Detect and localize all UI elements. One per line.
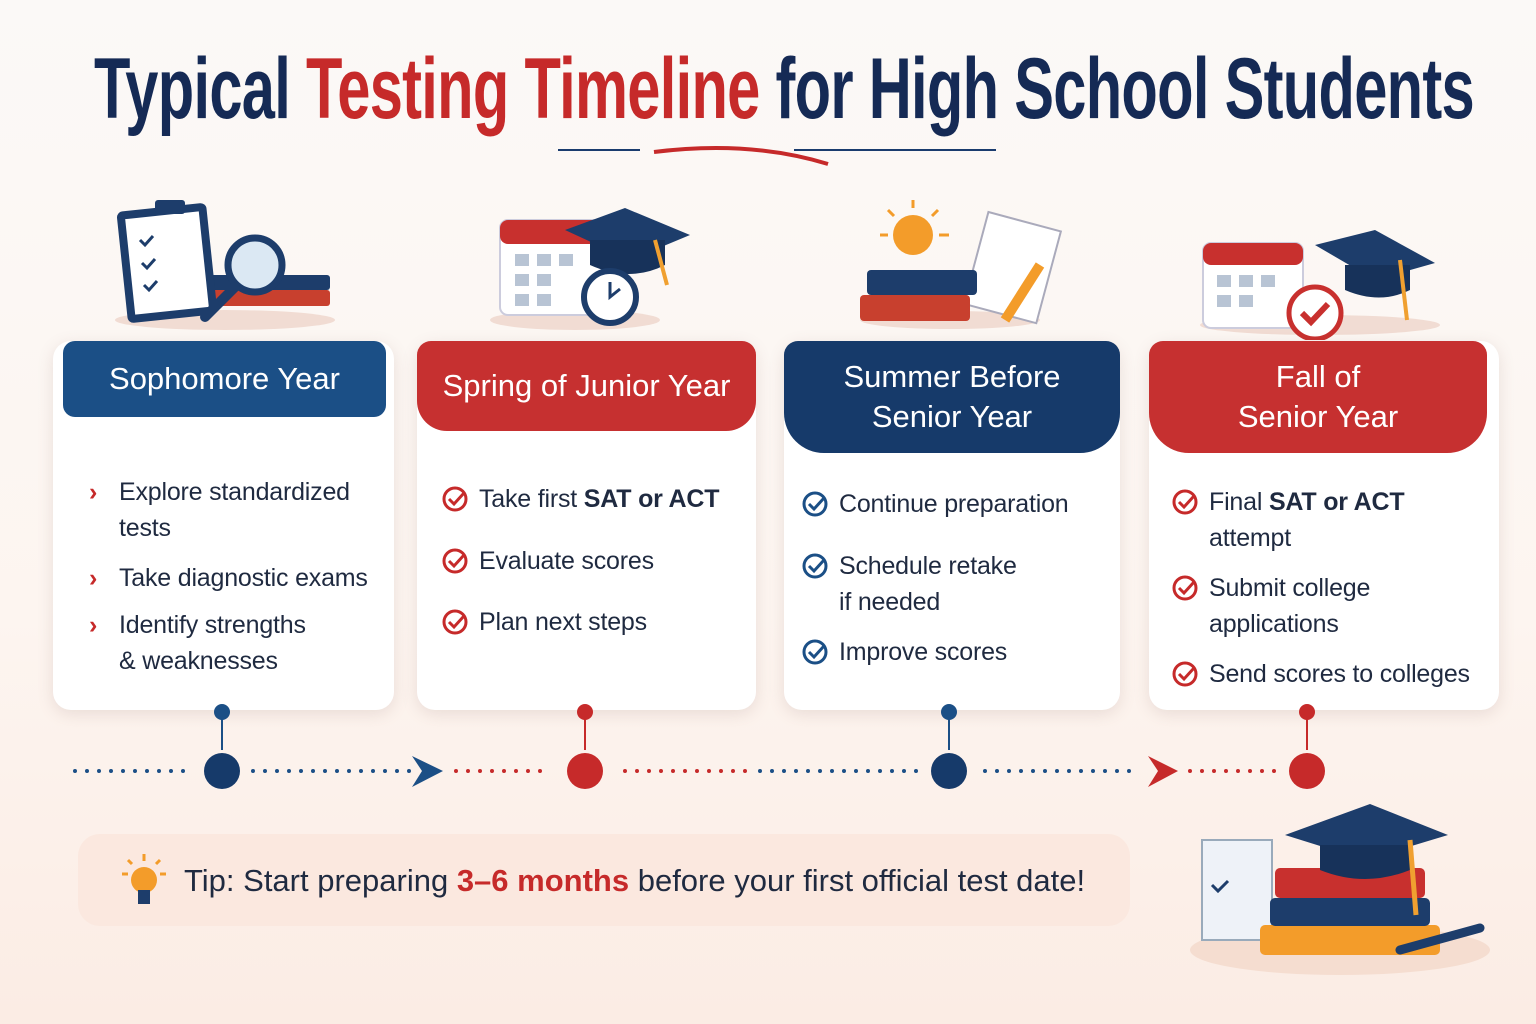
panel: spring junior (417, 341, 756, 710)
list: sophomore: Explore standardized tests (119, 478, 350, 542)
timeline (73, 704, 1325, 789)
header: summer: Summer Before (843, 359, 1061, 394)
list: spring junior: Evaluate scores (479, 547, 654, 575)
icon: clipboard and magnifier (115, 200, 335, 330)
header: fall (1149, 341, 1487, 453)
list: spring junior: Plan next steps (479, 608, 647, 636)
header: spring junior: Spring of Junior Year (443, 368, 730, 403)
tip box (78, 834, 1130, 926)
list: fall (1172, 488, 1470, 688)
list: fall: Submit college applications (1209, 574, 1370, 638)
list: summer (802, 490, 1068, 666)
panel: sophomore year: › (89, 611, 97, 639)
header: summer (784, 341, 1120, 453)
icon: calendar check and cap (1200, 230, 1440, 340)
panel: sophomore year (53, 341, 394, 710)
list: sophomore: Identify strengths & weaknesses (119, 611, 306, 675)
list: spring junior: Take first SAT or ACT (479, 485, 719, 513)
title: Typical Testing Timeline for High School Students (94, 41, 1474, 137)
header: spring junior (417, 341, 756, 431)
title underline (558, 146, 996, 166)
header: fall: Fall of (1276, 359, 1360, 394)
icon: lightbulb (122, 854, 166, 904)
icon: books with cap (1190, 804, 1490, 975)
icon: sun, books and paper (860, 200, 1062, 329)
header: fall: Senior Year (1238, 399, 1398, 434)
tip text: Tip: Start preparing 3–6 months before your first official test date! (184, 863, 1085, 898)
list: spring junior (442, 485, 720, 636)
header: sophomore (63, 341, 386, 417)
header: sophomore: Sophomore Year (109, 361, 340, 396)
list: summer: Improve scores (839, 638, 1007, 666)
header: summer: Senior Year (872, 399, 1032, 434)
list: sophomore: Take diagnostic exams (119, 564, 368, 592)
panel: summer before senior (784, 341, 1120, 710)
list: summer: Schedule retake if needed (839, 552, 1017, 616)
panel: sophomore year: › (89, 564, 97, 592)
list: fall: Final SAT or ACT attempt (1209, 488, 1404, 552)
list: sophomore (89, 478, 368, 675)
panel: fall senior (1149, 341, 1499, 710)
list: fall: Send scores to colleges (1209, 660, 1470, 688)
list: summer: Continue preparation (839, 490, 1068, 518)
panel: sophomore year: › (89, 478, 97, 506)
icon: calendar, cap and clock (490, 208, 690, 330)
